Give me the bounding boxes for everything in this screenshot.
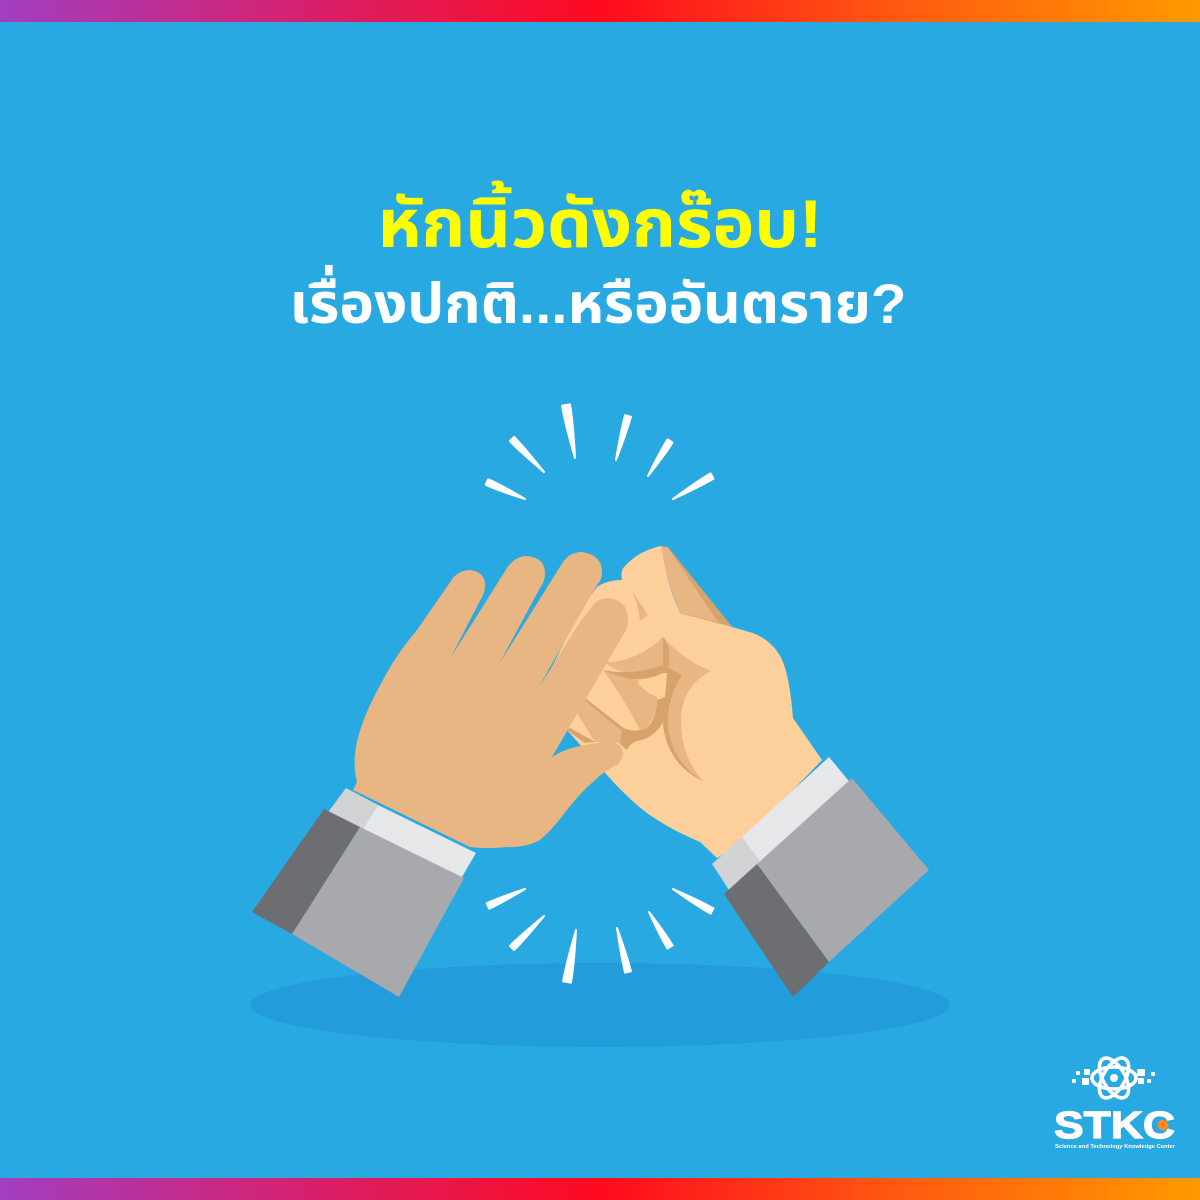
right cuff <box>712 757 929 997</box>
icon: atom <box>1092 1053 1136 1103</box>
left hand <box>353 552 628 848</box>
logo orange dot <box>1158 1120 1168 1130</box>
right hand: snapping fist <box>535 546 822 858</box>
curled finger tan <box>603 670 657 730</box>
logo: STKC <box>1054 1053 1176 1150</box>
dark band under finger <box>603 665 711 750</box>
cuff band <box>361 805 476 882</box>
lower finger edge <box>584 698 622 730</box>
snap rays: top <box>486 404 714 499</box>
top gradient bar <box>0 0 1200 22</box>
lower finger <box>577 698 622 743</box>
icon: data dots <box>1072 1069 1155 1085</box>
sleeve <box>292 827 464 997</box>
ground shadow <box>250 963 950 1047</box>
logo wordmark: STKC <box>1054 1105 1175 1147</box>
small pale nail <box>637 673 667 697</box>
sleeve dark panel <box>252 809 360 934</box>
title <box>290 180 906 335</box>
tan facet <box>660 546 718 622</box>
pinky shadow <box>567 728 595 743</box>
heading: white line: เรื่องปกติ...หรืออันตราย? <box>290 264 906 335</box>
snap rays: bottom <box>487 889 714 983</box>
sleeve dark panel <box>724 864 829 997</box>
left cuff <box>252 788 476 997</box>
hand base <box>535 546 822 858</box>
knuckle triangle <box>630 588 648 621</box>
crease: centre <box>663 637 670 667</box>
palm crescent shadow <box>663 675 703 781</box>
cuff light end <box>326 788 378 832</box>
logo tagline: Science and Technology Knowledge Center <box>1055 1144 1176 1150</box>
sleeve <box>757 778 929 962</box>
crease: upper tan <box>605 637 711 675</box>
top edge shadow <box>662 546 733 630</box>
cuff band <box>742 757 851 864</box>
heading: yellow line: หักนิ้วดังกร๊อบ! <box>378 180 822 262</box>
palm crescent <box>667 671 711 781</box>
bottom gradient bar <box>0 1178 1200 1200</box>
cuff light end <box>712 837 762 893</box>
